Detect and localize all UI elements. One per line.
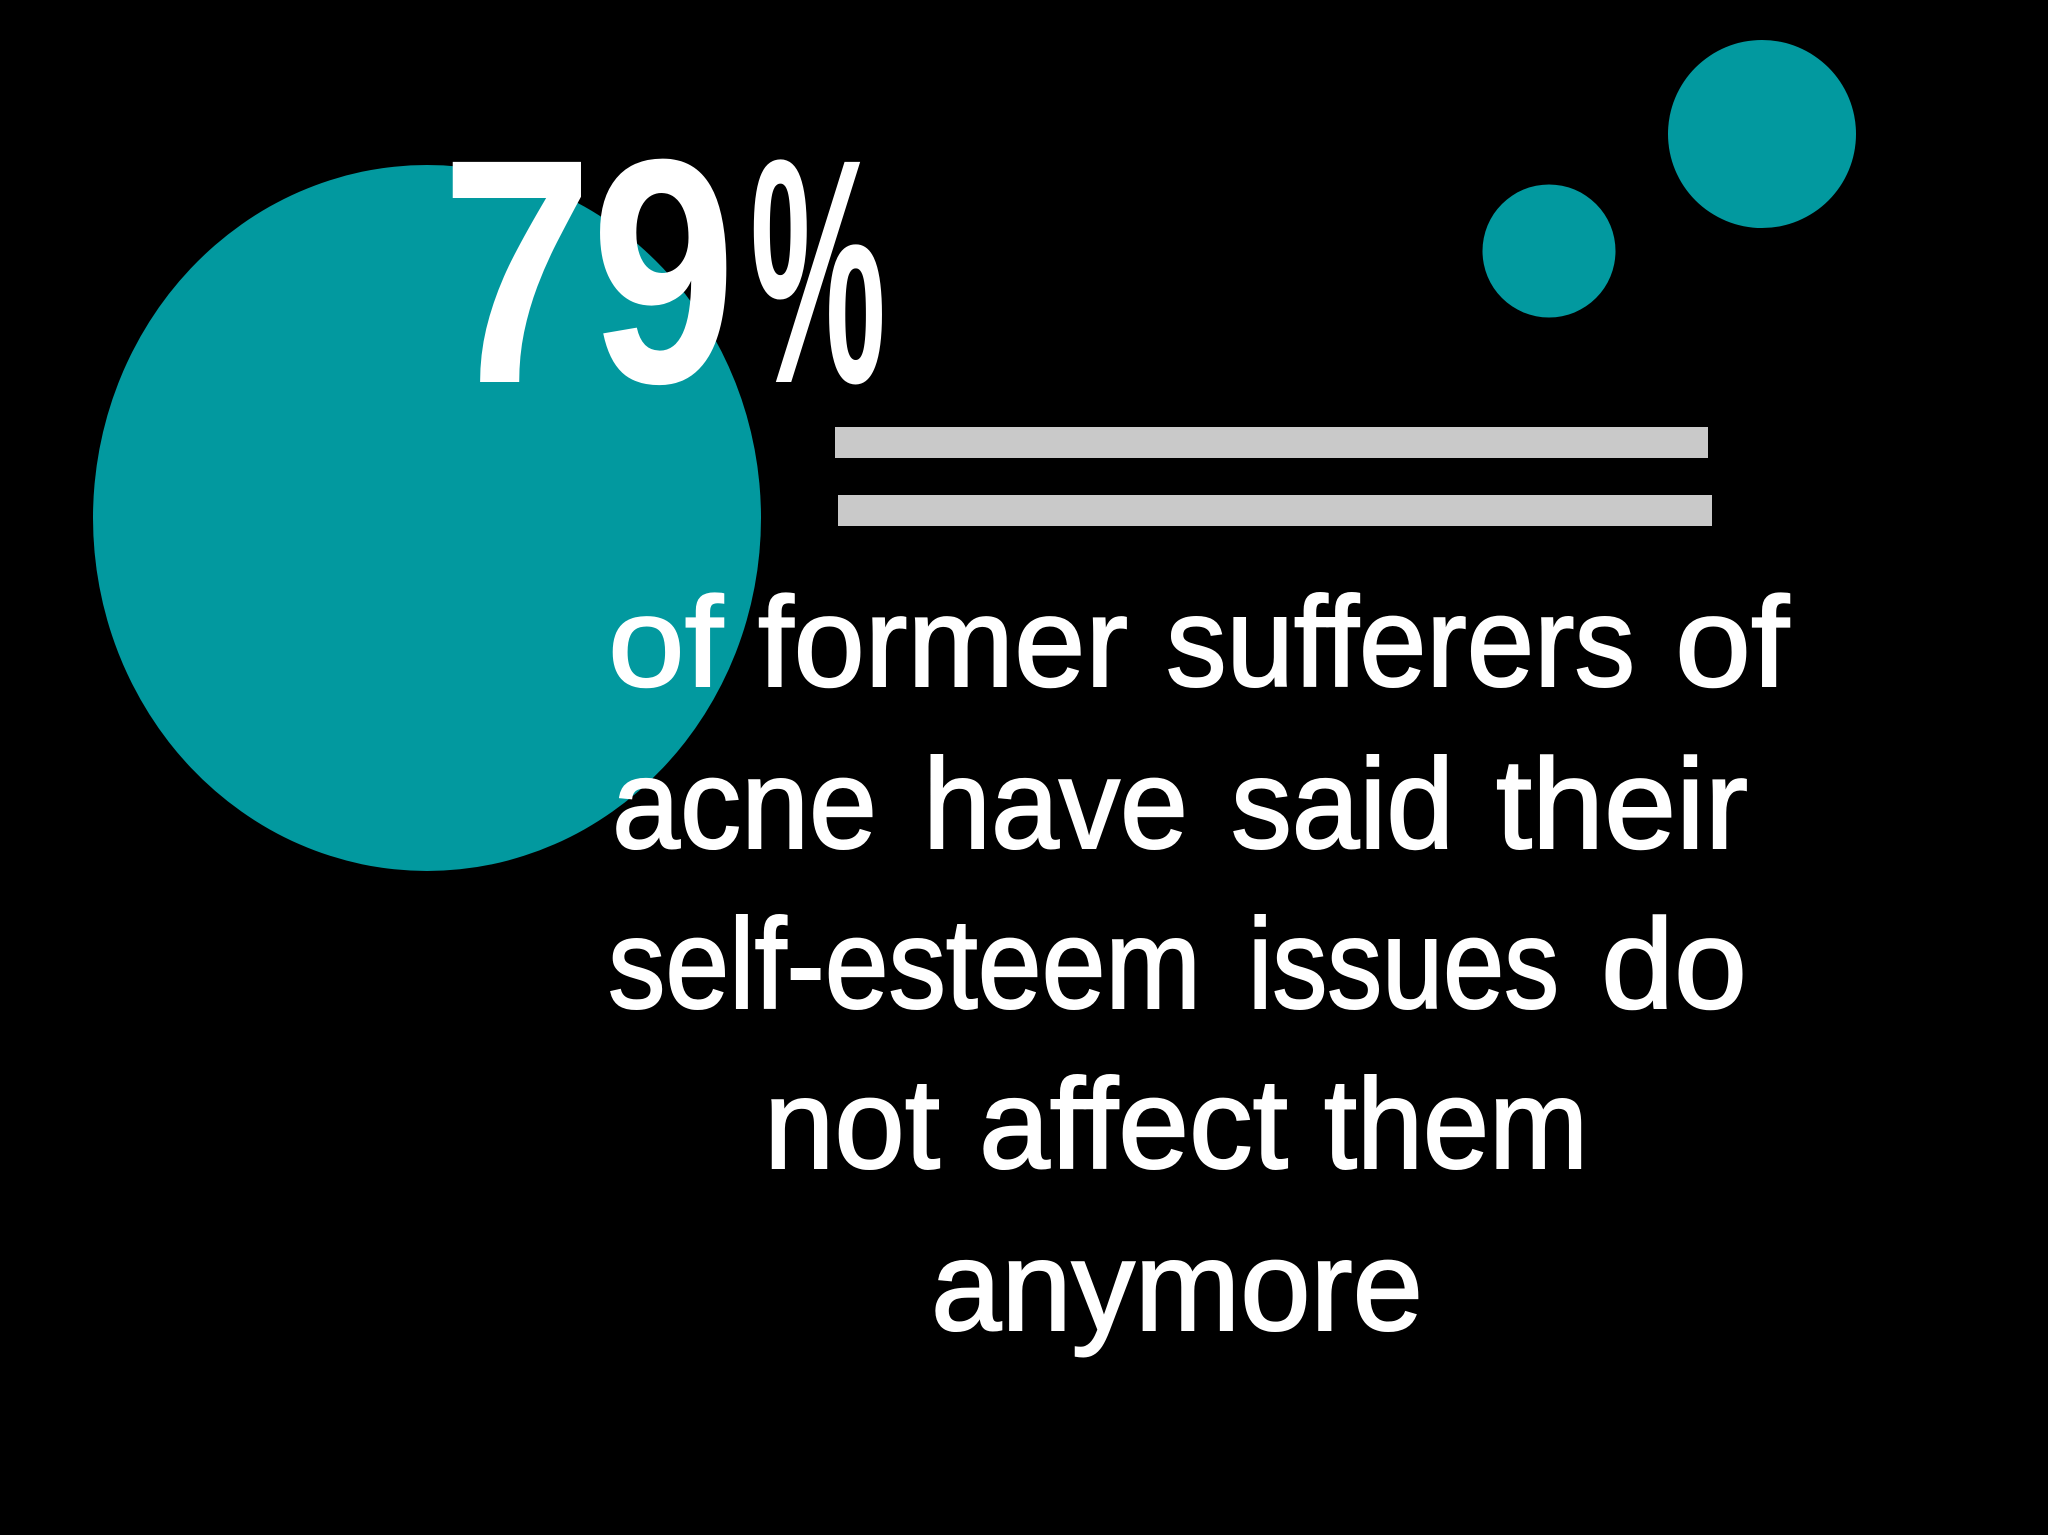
description text: affect [979,1053,1288,1196]
description text: not [764,1053,940,1196]
description text: anymore [931,1215,1423,1358]
statistic: 79% [441,92,886,450]
description text: issues [1248,893,1559,1036]
description text [608,571,1789,1358]
small teal circle [1482,184,1616,318]
statistic: 79%: 9 [591,92,736,450]
statistic: 79%: 7 [441,92,593,450]
upper grey bar [835,427,1708,458]
infographic canvas: % [750,92,886,450]
description text: of [1675,571,1789,714]
description text: their [1496,733,1748,876]
description text: said [1231,733,1454,876]
description text: them [1324,1053,1588,1196]
lower grey bar [838,495,1712,526]
description text: have [923,733,1188,876]
large teal circle [93,165,761,871]
description text: do [1601,893,1747,1036]
description text: of [608,571,723,714]
medium teal circle [1668,40,1856,228]
description text: self-esteem [608,893,1201,1036]
description text: former [758,571,1128,714]
description text: sufferers [1166,571,1635,714]
description text: acne [612,733,877,876]
